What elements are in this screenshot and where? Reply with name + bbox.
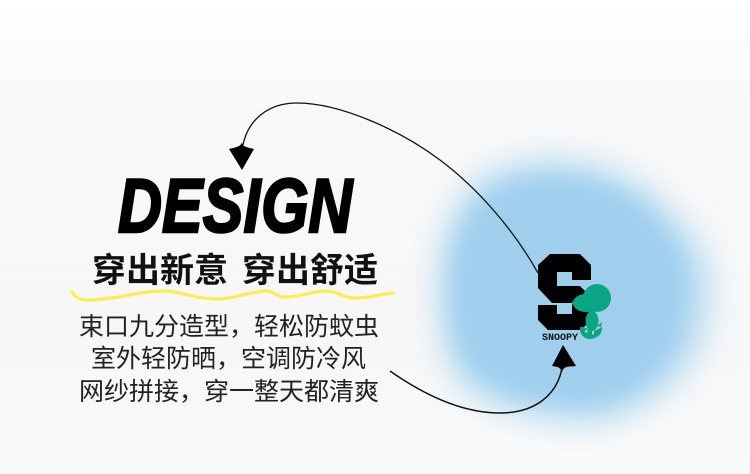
subtitle: 穿出舒适: [242, 252, 378, 290]
Snoopy figure: [572, 284, 611, 339]
letter S: [538, 254, 591, 330]
description text: 网纱拼接，穿一整天都清爽: [79, 378, 379, 406]
arrow: bottom curve to logo: [390, 345, 576, 413]
Snoopy feet details: [585, 330, 594, 334]
blue glow: [436, 158, 711, 424]
brand name: SNOOPY: [542, 332, 579, 344]
yellow underline: [72, 291, 393, 300]
description text: 束口九分造型，轻松防蚊虫: [79, 313, 379, 341]
subtitle: 穿出新意: [92, 252, 228, 290]
description text: 室外轻防晒，空调防冷风: [91, 345, 366, 373]
title: DESIGN: DESIGN: [118, 164, 353, 249]
description text: [79, 313, 379, 406]
subtitle: [92, 252, 378, 290]
logo: Snoopy S: [538, 254, 611, 344]
arrow: top curve to heading: [229, 103, 538, 273]
